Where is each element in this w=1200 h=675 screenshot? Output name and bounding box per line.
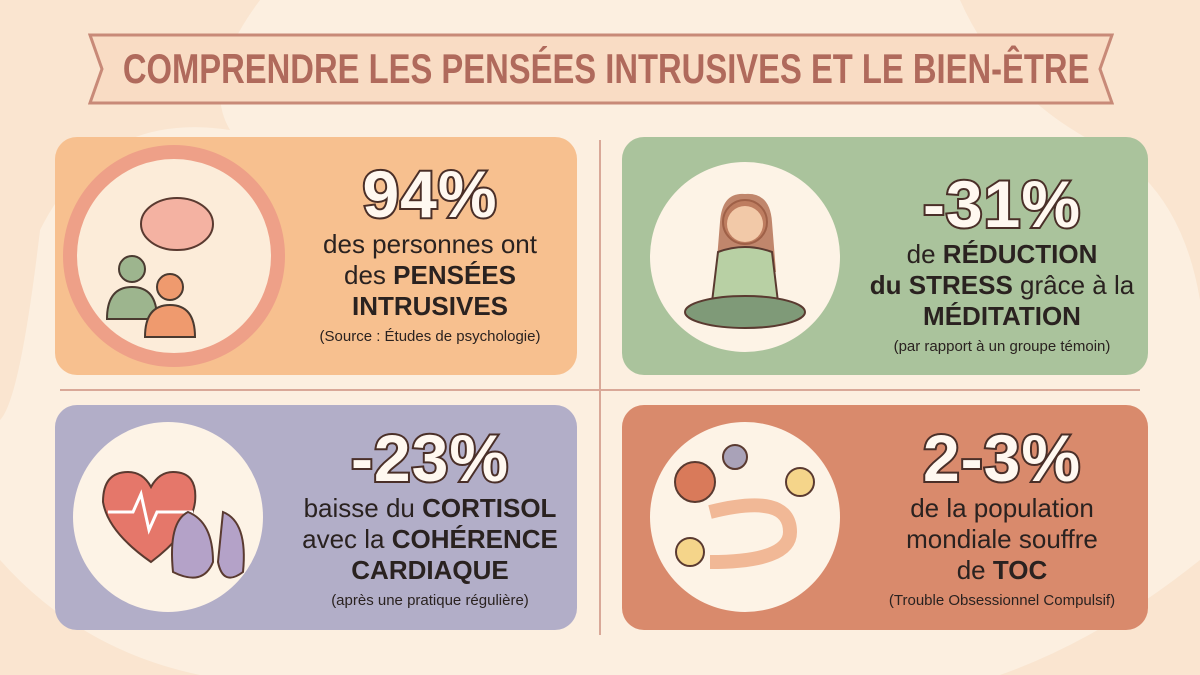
text: -31% stat: de RÉDUCTION — [907, 239, 1097, 269]
icon: gears and bulbs — [650, 422, 840, 612]
text: -23% stat: (après une pratique régulière) — [331, 592, 529, 609]
panel: -23% — [55, 405, 577, 630]
text: 94% stat: (Source : Études de psychologie) — [320, 328, 540, 345]
text: 94% stat — [320, 157, 540, 345]
text: 94% stat: des personnes ont — [323, 229, 537, 259]
text: -23% stat: CARDIAQUE — [351, 555, 509, 585]
text: -23% stat: baisse du CORTISOL — [304, 493, 556, 523]
panel: 94% — [55, 137, 577, 375]
text: -31% stat: MÉDITATION — [923, 301, 1081, 331]
text: 2-3% stat: de la population — [910, 493, 1094, 523]
text: 2-3% stat: de TOC — [957, 555, 1047, 585]
text: 2-3% stat: (Trouble Obsessionnel Compulsif) — [889, 592, 1115, 609]
text: 2-3% stat — [889, 421, 1115, 609]
text: -23% stat: avec la COHÉRENCE — [302, 524, 558, 554]
text: 94% stat: 94% — [362, 157, 498, 231]
title banner — [88, 34, 1114, 104]
panel: -31% — [622, 137, 1148, 375]
text: 2-3% stat: 2-3% — [923, 421, 1081, 495]
text: 2-3% stat: mondiale souffre — [906, 524, 1098, 554]
icon: meditation — [650, 162, 840, 352]
text: -23% stat: -23% — [351, 421, 509, 495]
text: -23% stat — [302, 421, 558, 609]
text: -31% stat — [870, 167, 1134, 355]
icon: brain and people — [63, 145, 285, 367]
text: 94% stat: des PENSÉES — [344, 260, 516, 290]
text: 94% stat: INTRUSIVES — [352, 291, 508, 321]
text: -31% stat: (par rapport à un groupe témoin) — [894, 338, 1110, 355]
text: -31% stat: -31% — [923, 167, 1081, 241]
panel: 2-3% — [622, 405, 1148, 630]
text: -31% stat: du STRESS grâce à la — [870, 270, 1134, 300]
title banner: COMPRENDRE LES PENSÉES INTRUSIVES ET LE BIEN-ÊTRE — [123, 45, 1089, 92]
icon: heart and lungs — [73, 422, 263, 612]
